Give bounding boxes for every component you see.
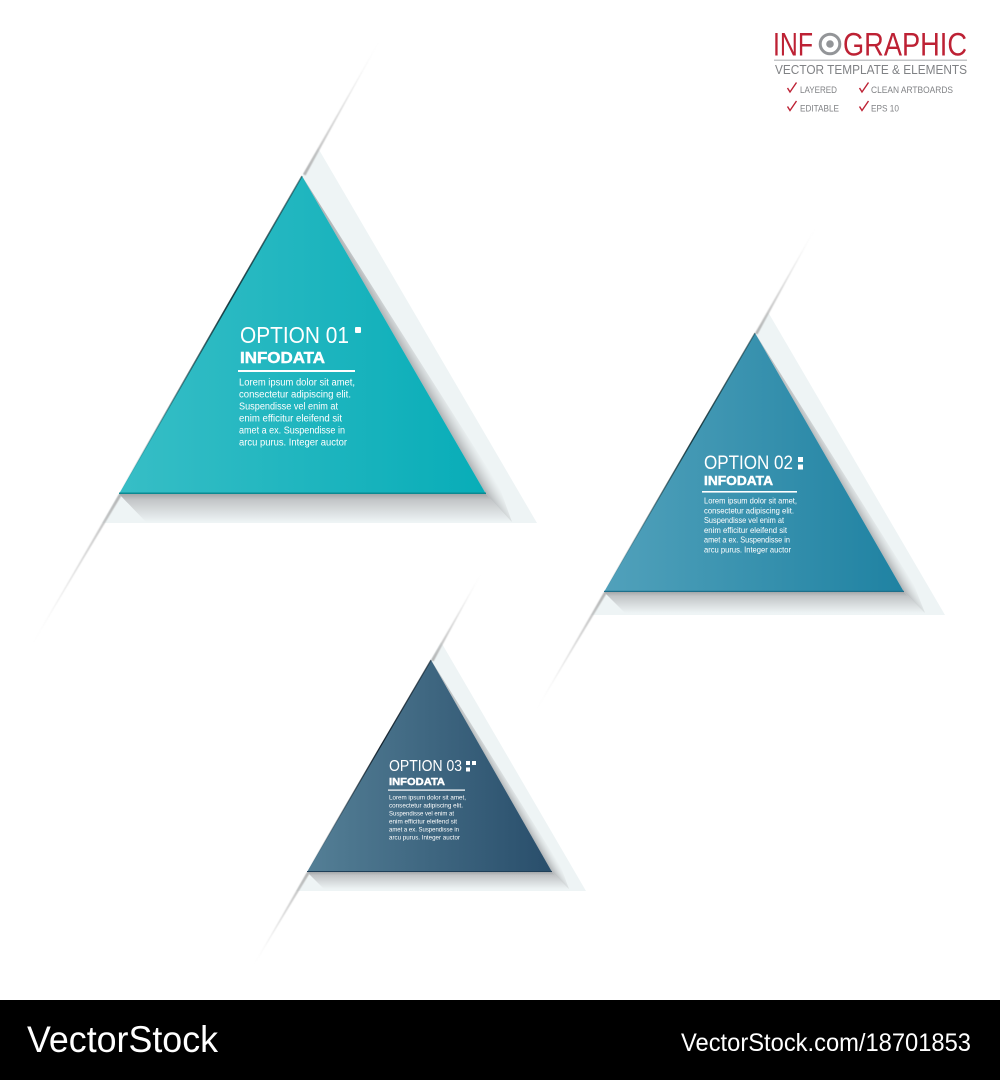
body copy 03: Suspendisse vel enim at (389, 810, 454, 818)
dark left edge 02 (604, 333, 755, 592)
bottom shadow 03 (307, 872, 569, 889)
heading option 01: OPTION 01 (240, 322, 349, 348)
dark left edge 03 (307, 660, 431, 872)
logo wordmark left: INF (773, 26, 813, 62)
rule 02 (702, 491, 797, 493)
bottom edge 01 (119, 492, 486, 494)
body copy 02: Lorem ipsum dolor sit amet, (704, 496, 797, 506)
text block: option 01 (238, 322, 361, 448)
logo rule (774, 60, 967, 61)
icon: check layered (788, 82, 796, 92)
body copy 01: arcu purus. Integer auctor (239, 438, 348, 448)
panel: option 02 triangle (535, 225, 945, 712)
body copy 01: enim efficitur eleifend sit (239, 414, 342, 424)
body copy 02 (704, 496, 797, 554)
diagonal fold shadow upper 01 (303, 38, 381, 176)
label eps: EPS 10 (871, 104, 899, 114)
logo tagline: VECTOR TEMPLATE & ELEMENTS (775, 63, 967, 77)
right edge shadow 02 (755, 333, 925, 613)
body copy 02: consectetur adipiscing elit. (704, 506, 794, 515)
diagonal fold shadow lower 02 (535, 592, 606, 712)
panel: option 01 triangle (30, 38, 537, 648)
body copy 02: Suspendisse vel enim at (704, 516, 785, 525)
diagonal fold shadow lower 03 (252, 872, 310, 968)
backing paper triangle 01 (102, 148, 537, 523)
body copy 03: arcu purus. Integer auctor (389, 834, 461, 842)
subheading infodata 01: INFODATA (240, 350, 325, 367)
logo: infographic vector template (773, 26, 967, 114)
backing paper triangle 02 (591, 312, 945, 615)
panel: option 03 triangle (252, 572, 586, 968)
square marker 01 (355, 327, 361, 333)
navy triangle 03 (307, 660, 552, 872)
icon: target circle (820, 34, 840, 54)
teal triangle 01 (119, 176, 486, 494)
rule 01 (238, 370, 355, 372)
body copy 01: Lorem ipsum dolor sit amet, (239, 378, 355, 388)
square markers 03 (466, 761, 476, 772)
black bar (0, 1000, 1000, 1080)
backing paper triangle 03 (296, 642, 586, 891)
text block: option 03 (388, 758, 476, 842)
rule 03 (388, 790, 465, 791)
body copy 01: amet a ex. Suspendisse in (239, 426, 345, 436)
text block: option 02 (702, 453, 803, 554)
body copy 03: consectetur adipiscing elit. (389, 802, 463, 810)
checklist (788, 82, 953, 114)
icon: check editable (788, 101, 796, 110)
bottom shadow 02 (604, 592, 925, 613)
heading option 03: OPTION 03 (389, 758, 462, 775)
bottom edge 03 (307, 871, 552, 872)
body copy 03 (389, 794, 466, 842)
dark left edge 01 (119, 176, 302, 494)
icon: check clean artboards (860, 82, 868, 92)
subheading infodata 02: INFODATA (704, 473, 774, 488)
footer url: VectorStock.com/18701853 (681, 1029, 971, 1057)
body copy 03: amet a ex. Suspendisse in (389, 826, 459, 834)
bottom shadow 01 (119, 494, 512, 522)
diagonal fold shadow lower 01 (30, 494, 122, 648)
footer brand: VectorStock (27, 1019, 218, 1060)
footer band (0, 1000, 1000, 1080)
logo wordmark right: GRAPHIC (843, 26, 967, 62)
label clean artboards: CLEAN ARTBOARDS (871, 85, 953, 95)
label layered: LAYERED (800, 85, 837, 95)
body copy 02: amet a ex. Suspendisse in (704, 536, 790, 544)
label editable: EDITABLE (800, 104, 839, 114)
right edge shadow 01 (302, 176, 512, 522)
bottom edge 02 (604, 591, 904, 592)
blue triangle 02 (604, 333, 904, 592)
subheading infodata 03: INFODATA (389, 776, 445, 788)
body copy 01 (239, 378, 355, 448)
body copy 03: Lorem ipsum dolor sit amet, (389, 794, 466, 802)
diagonal fold shadow upper 03 (431, 572, 482, 662)
body copy 01: Suspendisse vel enim at (239, 402, 338, 412)
heading option 02: OPTION 02 (704, 453, 793, 474)
body copy 01: consectetur adipiscing elit. (239, 390, 351, 400)
body copy 02: arcu purus. Integer auctor (704, 545, 791, 554)
icon: check eps (860, 101, 868, 110)
square markers 02 (798, 457, 803, 470)
body copy 03: enim efficitur eleifend sit (389, 818, 457, 826)
body copy 02: enim efficitur eleifend sit (704, 526, 788, 535)
diagonal fold shadow upper 02 (755, 225, 817, 334)
right edge shadow 03 (431, 660, 569, 889)
